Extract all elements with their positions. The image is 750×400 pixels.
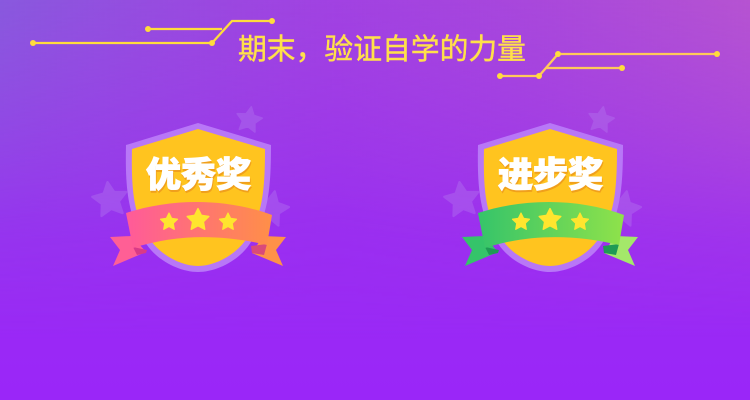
circuit lines: top right <box>497 51 720 79</box>
background stars <box>443 105 643 227</box>
badge: excellence award: 优秀奖 <box>146 156 251 195</box>
shield <box>126 123 271 272</box>
badge: excellence award <box>91 105 291 272</box>
award name: 优秀奖 <box>147 158 252 197</box>
ribbon <box>462 202 638 266</box>
title: 期末，验证自学的力量 <box>238 34 526 66</box>
shield <box>478 123 623 272</box>
background stars <box>91 105 291 227</box>
badge: progress award <box>443 105 643 272</box>
ribbon <box>110 202 286 266</box>
circuit lines: top left <box>30 18 275 46</box>
rating stars <box>160 209 237 229</box>
award name: 进步奖 <box>499 158 604 197</box>
background <box>0 0 750 270</box>
badge: progress award: 进步奖 <box>498 156 603 195</box>
rating stars <box>512 209 589 229</box>
